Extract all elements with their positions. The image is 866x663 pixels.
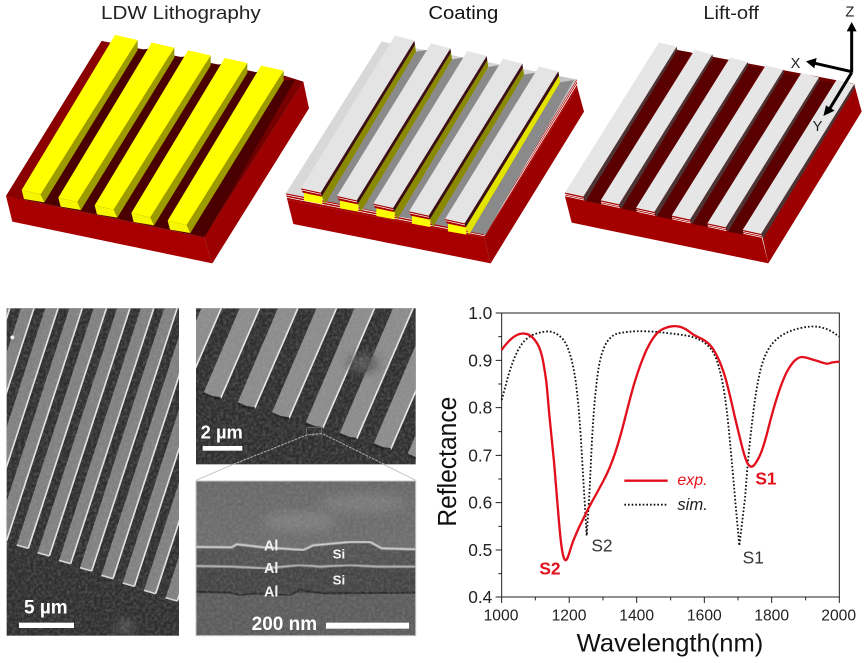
SEM image: cross-section with layer labels: Si bbox=[333, 547, 345, 562]
x-axis tick labels: 1600 bbox=[687, 608, 722, 625]
SEM image: cross-section with layer labels: Al bbox=[264, 584, 278, 600]
3D block: lift-off bbox=[565, 42, 862, 263]
dip labels: S1 bbox=[743, 547, 764, 567]
SEM image: oblique view with 2 µm scale bar bbox=[196, 308, 416, 464]
x-axis tick labels: 2000 bbox=[821, 608, 856, 625]
legend: sim. bbox=[677, 495, 708, 514]
y-axis tick labels: 0.4 bbox=[468, 587, 493, 607]
y-axis tick labels: 0.6 bbox=[468, 493, 492, 513]
x-axis title: Wavelength(nm) bbox=[577, 631, 763, 658]
dip labels: S1 bbox=[755, 469, 777, 489]
SEM image: cross-section with layer labels: Al bbox=[264, 561, 278, 577]
dip labels: S2 bbox=[539, 558, 561, 578]
y-axis tick labels: 0.9 bbox=[468, 350, 492, 370]
SEM image: wide view with 5 µm scale bar bbox=[6, 308, 179, 636]
icon: XYZ axes: X bbox=[791, 56, 801, 72]
dip labels bbox=[539, 469, 777, 578]
reflectance line chart bbox=[434, 303, 856, 658]
simulated curve bbox=[502, 326, 839, 546]
y-axis tick labels: 0.5 bbox=[468, 540, 492, 560]
legend bbox=[624, 472, 708, 514]
SEM image: cross-section with layer labels: 200 nm bbox=[252, 614, 317, 635]
3D block: coating bbox=[286, 36, 584, 263]
x-axis tick labels bbox=[484, 608, 856, 625]
y-axis tick labels: 0.8 bbox=[468, 398, 492, 418]
x-axis tick labels: 1200 bbox=[552, 608, 587, 625]
title: Lift-off: Lift-off bbox=[703, 2, 760, 23]
experimental curve bbox=[502, 326, 839, 560]
title: LDW Lithography: LDW Lithography bbox=[101, 2, 261, 23]
zoom connector lines bbox=[196, 464, 416, 480]
y-axis tick labels: 0.7 bbox=[468, 445, 492, 465]
x-axis tick labels: 1800 bbox=[754, 608, 789, 625]
x-axis tick labels: 1000 bbox=[484, 608, 519, 625]
dip labels: S2 bbox=[591, 535, 613, 555]
3D block: LDW lithography bbox=[6, 35, 309, 263]
chart axes and ticks bbox=[496, 313, 839, 603]
legend: exp. bbox=[677, 472, 708, 489]
icon: XYZ axes bbox=[791, 5, 857, 135]
SEM image: cross-section with layer labels: Al bbox=[264, 539, 278, 555]
title: Coating: Coating bbox=[428, 2, 498, 23]
y-axis title: Reflectance bbox=[434, 397, 462, 527]
SEM image: cross-section with layer labels bbox=[196, 481, 416, 636]
SEM image: oblique view with 2 µm scale bar: 2 µm bbox=[201, 421, 243, 442]
SEM image: wide view with 5 µm scale bar: 5 µm bbox=[24, 597, 68, 618]
icon: XYZ axes: Y bbox=[813, 119, 823, 135]
x-axis tick labels: 1400 bbox=[619, 608, 654, 625]
icon: XYZ axes: Z bbox=[845, 5, 854, 21]
SEM image: cross-section with layer labels: Si bbox=[333, 573, 345, 588]
y-axis tick labels bbox=[468, 303, 493, 607]
y-axis tick labels: 1.0 bbox=[468, 303, 492, 323]
